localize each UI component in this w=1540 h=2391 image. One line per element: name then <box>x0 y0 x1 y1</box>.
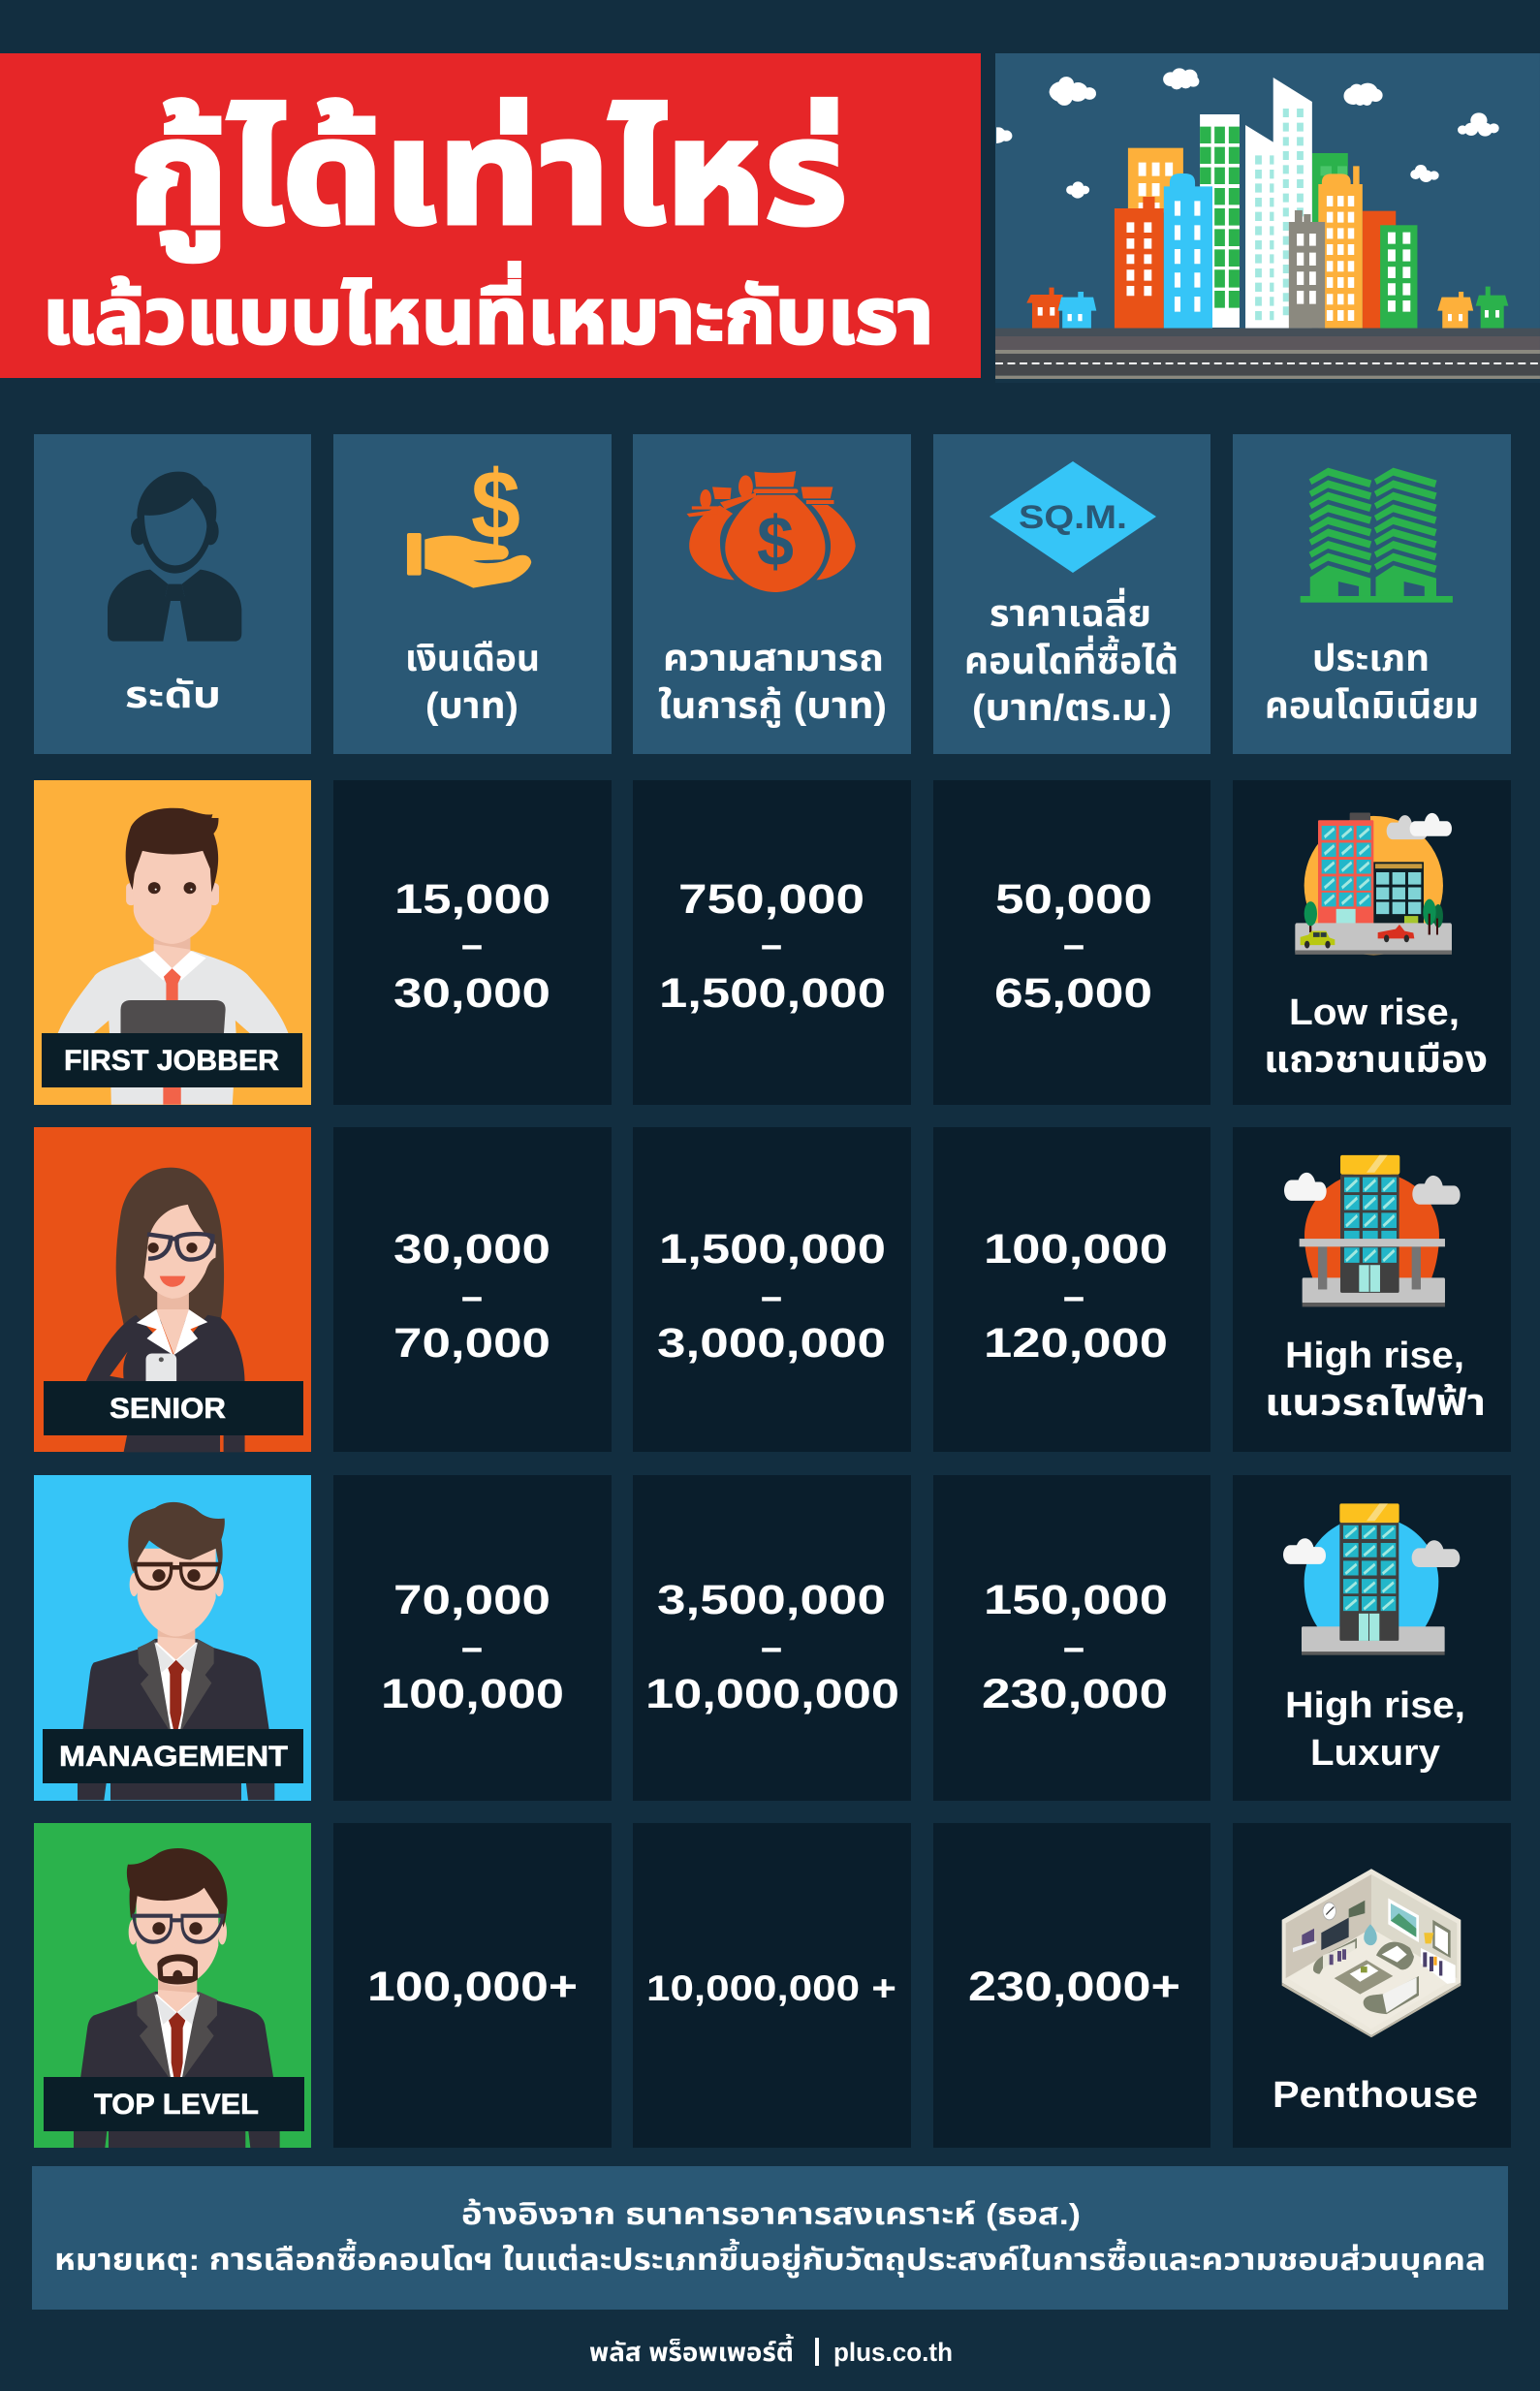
panel: first jobber price: 50,000 <box>995 876 1152 923</box>
panel: first jobber price: – <box>1063 922 1084 968</box>
panel: senior loan: 3,000,000 <box>657 1320 886 1367</box>
label: borrowing capacity: ความสามารถ <box>663 639 884 679</box>
panel: high rise near BTS <box>1233 1127 1511 1452</box>
panel: senior salary: 30,000 <box>393 1226 550 1273</box>
panel: first jobber portrait <box>34 780 311 1105</box>
label: average price: ราคาเฉลี่ย <box>990 587 1151 635</box>
label: high rise near BTS: High rise, <box>1285 1336 1464 1376</box>
panel: senior salary <box>333 1127 612 1452</box>
panel: salary header <box>333 434 612 754</box>
icon: luxury high rise <box>1283 1503 1460 1655</box>
label: low rise: แถวชานเมือง <box>1264 1040 1488 1081</box>
white slanted tower <box>1245 78 1312 329</box>
icon: money bags: $ <box>757 503 794 581</box>
panel: top level salary <box>333 1823 612 2148</box>
panel: low rise <box>1233 780 1511 1105</box>
panel: senior portrait <box>34 1127 311 1452</box>
label: penthouse: Penthouse <box>1273 2075 1478 2116</box>
panel: first jobber loan: 750,000 <box>678 876 864 923</box>
panel: penthouse <box>1233 1823 1511 2148</box>
panel: senior price: – <box>1063 1274 1084 1320</box>
panel: management price: 230,000 <box>982 1671 1168 1717</box>
panel: management price: 150,000 <box>984 1577 1168 1623</box>
icon: SQ.M. diamond: SQ.M. <box>1019 499 1127 536</box>
orange rear building <box>1128 148 1183 212</box>
label: salary <box>405 639 540 727</box>
back green tower <box>1312 153 1348 224</box>
panel: senior loan <box>633 1127 911 1452</box>
badge: first jobber: FIRST JOBBER <box>64 1045 279 1077</box>
panel: city skyline illustration <box>995 53 1540 383</box>
icon: isometric penthouse room <box>1282 1869 1461 2037</box>
footer credit: plus.co.th <box>833 2338 953 2367</box>
panel: management price: – <box>1063 1624 1084 1671</box>
panel: first jobber loan: – <box>761 922 782 968</box>
white and green tower <box>1200 114 1240 328</box>
panel: management portrait <box>34 1475 311 1801</box>
footer credit <box>589 2334 953 2367</box>
panel: condo type header <box>1233 434 1511 754</box>
panel: first jobber salary: 15,000 <box>394 876 550 923</box>
label: borrowing capacity: ในการกู้ (บาท) <box>658 686 887 728</box>
panel: management salary <box>333 1475 612 1801</box>
badge: top level <box>44 2077 304 2131</box>
footer credit: พลัส พร็อพเพอร์ตี้ <box>589 2334 795 2367</box>
panel: top level loan: 10,000,000 + <box>646 1968 896 2008</box>
panel: first jobber loan <box>633 780 911 1105</box>
title banner <box>0 53 981 378</box>
badge: top level: TOP LEVEL <box>94 2089 259 2121</box>
label: condo type: คอนโดมิเนียม <box>1265 686 1479 727</box>
panel: management loan <box>633 1475 911 1801</box>
icon: green towers <box>1301 468 1453 603</box>
panel: management price <box>933 1475 1210 1801</box>
badge: management <box>43 1729 303 1783</box>
panel: management salary: 100,000 <box>381 1671 564 1717</box>
panel: high rise luxury <box>1233 1475 1511 1801</box>
panel: first jobber salary <box>333 780 612 1105</box>
small houses <box>1026 287 1508 329</box>
icon: dollar on hand <box>407 451 531 588</box>
label: average price <box>964 587 1179 729</box>
road <box>995 329 1540 383</box>
panel: top level price: 230,000+ <box>968 1964 1180 2010</box>
label: salary: เงินเดือน <box>405 639 540 679</box>
panel: first jobber salary: – <box>461 922 483 968</box>
panel: senior salary: – <box>461 1274 483 1320</box>
source line: อ้างอิงจาก ธนาคารอาคารสงเคราะห์ (ธอส.) <box>461 2197 1081 2231</box>
label: condo type <box>1265 639 1479 727</box>
icon: dollar on hand: $ <box>471 451 520 559</box>
red building <box>1115 197 1164 329</box>
panel: senior loan: 1,500,000 <box>659 1226 886 1273</box>
icon: money bags <box>687 471 856 592</box>
badge: senior <box>44 1381 303 1435</box>
icon: SQ.M. diamond <box>990 461 1156 573</box>
label: high rise near BTS: แนวรถไฟฟ้า <box>1265 1383 1486 1424</box>
panel: first jobber salary: 30,000 <box>393 970 550 1017</box>
panel: first jobber price: 65,000 <box>994 970 1152 1017</box>
panel: level header <box>34 434 311 754</box>
note line: หมายเหตุ: การเลือกซื้อคอนโดฯ ในแต่ละประเภทขึ้นอยู่กับวัตถุประสงค์ในการซื้อและความชอบส่วนบุคคล <box>54 2238 1486 2278</box>
label: average price: (บาท/ตร.ม.) <box>972 688 1172 729</box>
blue building <box>1164 173 1212 329</box>
panel: first jobber loan: 1,500,000 <box>659 970 886 1017</box>
label: high rise near BTS <box>1265 1336 1486 1424</box>
label: high rise luxury <box>1285 1685 1465 1774</box>
label: high rise luxury: High rise, <box>1285 1685 1465 1726</box>
panel: senior price: 100,000 <box>984 1226 1168 1273</box>
title line 1: กู้ได้เท่าไหร่ <box>129 91 847 262</box>
label: low rise: Low rise, <box>1289 992 1460 1033</box>
icon: high rise with rail <box>1284 1155 1461 1306</box>
green right building <box>1380 225 1417 329</box>
panel: management loan: 3,500,000 <box>657 1577 886 1623</box>
panel: reference note <box>32 2166 1508 2310</box>
title line 2: แล้วแบบไหนที่เหมาะกับเรา <box>43 263 933 360</box>
panel: top level salary: 100,000+ <box>367 1964 578 2010</box>
panel: average price header <box>933 434 1210 754</box>
label: average price: คอนโดที่ซื้อได้ <box>964 635 1179 682</box>
panel: senior loan: – <box>761 1274 782 1320</box>
panel: top level price <box>933 1823 1210 2148</box>
panel: top level loan <box>633 1823 911 2148</box>
badge: senior: SENIOR <box>110 1393 226 1425</box>
label: level: ระดับ <box>125 676 221 716</box>
badge: management: MANAGEMENT <box>59 1741 288 1773</box>
label: condo type: ประเภท <box>1312 639 1430 679</box>
label: high rise luxury: Luxury <box>1310 1733 1440 1774</box>
panel: management salary: – <box>461 1624 483 1671</box>
badge: first jobber <box>42 1033 302 1087</box>
panel: top level portrait <box>34 1823 311 2148</box>
orange right tower <box>1318 166 1363 329</box>
panel: first jobber price <box>933 780 1210 1105</box>
panel: borrowing capacity header <box>633 434 911 754</box>
panel: senior price <box>933 1127 1210 1452</box>
label: borrowing capacity <box>658 639 887 728</box>
right red building <box>1363 211 1396 329</box>
label: low rise <box>1264 992 1488 1081</box>
panel: management loan: 10,000,000 <box>645 1671 899 1717</box>
grey tower <box>1289 210 1325 329</box>
panel: senior salary: 70,000 <box>393 1320 550 1367</box>
icon: low rise building <box>1295 812 1452 955</box>
panel: management salary: 70,000 <box>393 1577 550 1623</box>
icon: person silhouette <box>108 472 241 642</box>
panel: senior price: 120,000 <box>984 1320 1168 1367</box>
panel: management loan: – <box>761 1624 782 1671</box>
label: salary: (บาท) <box>425 686 519 727</box>
